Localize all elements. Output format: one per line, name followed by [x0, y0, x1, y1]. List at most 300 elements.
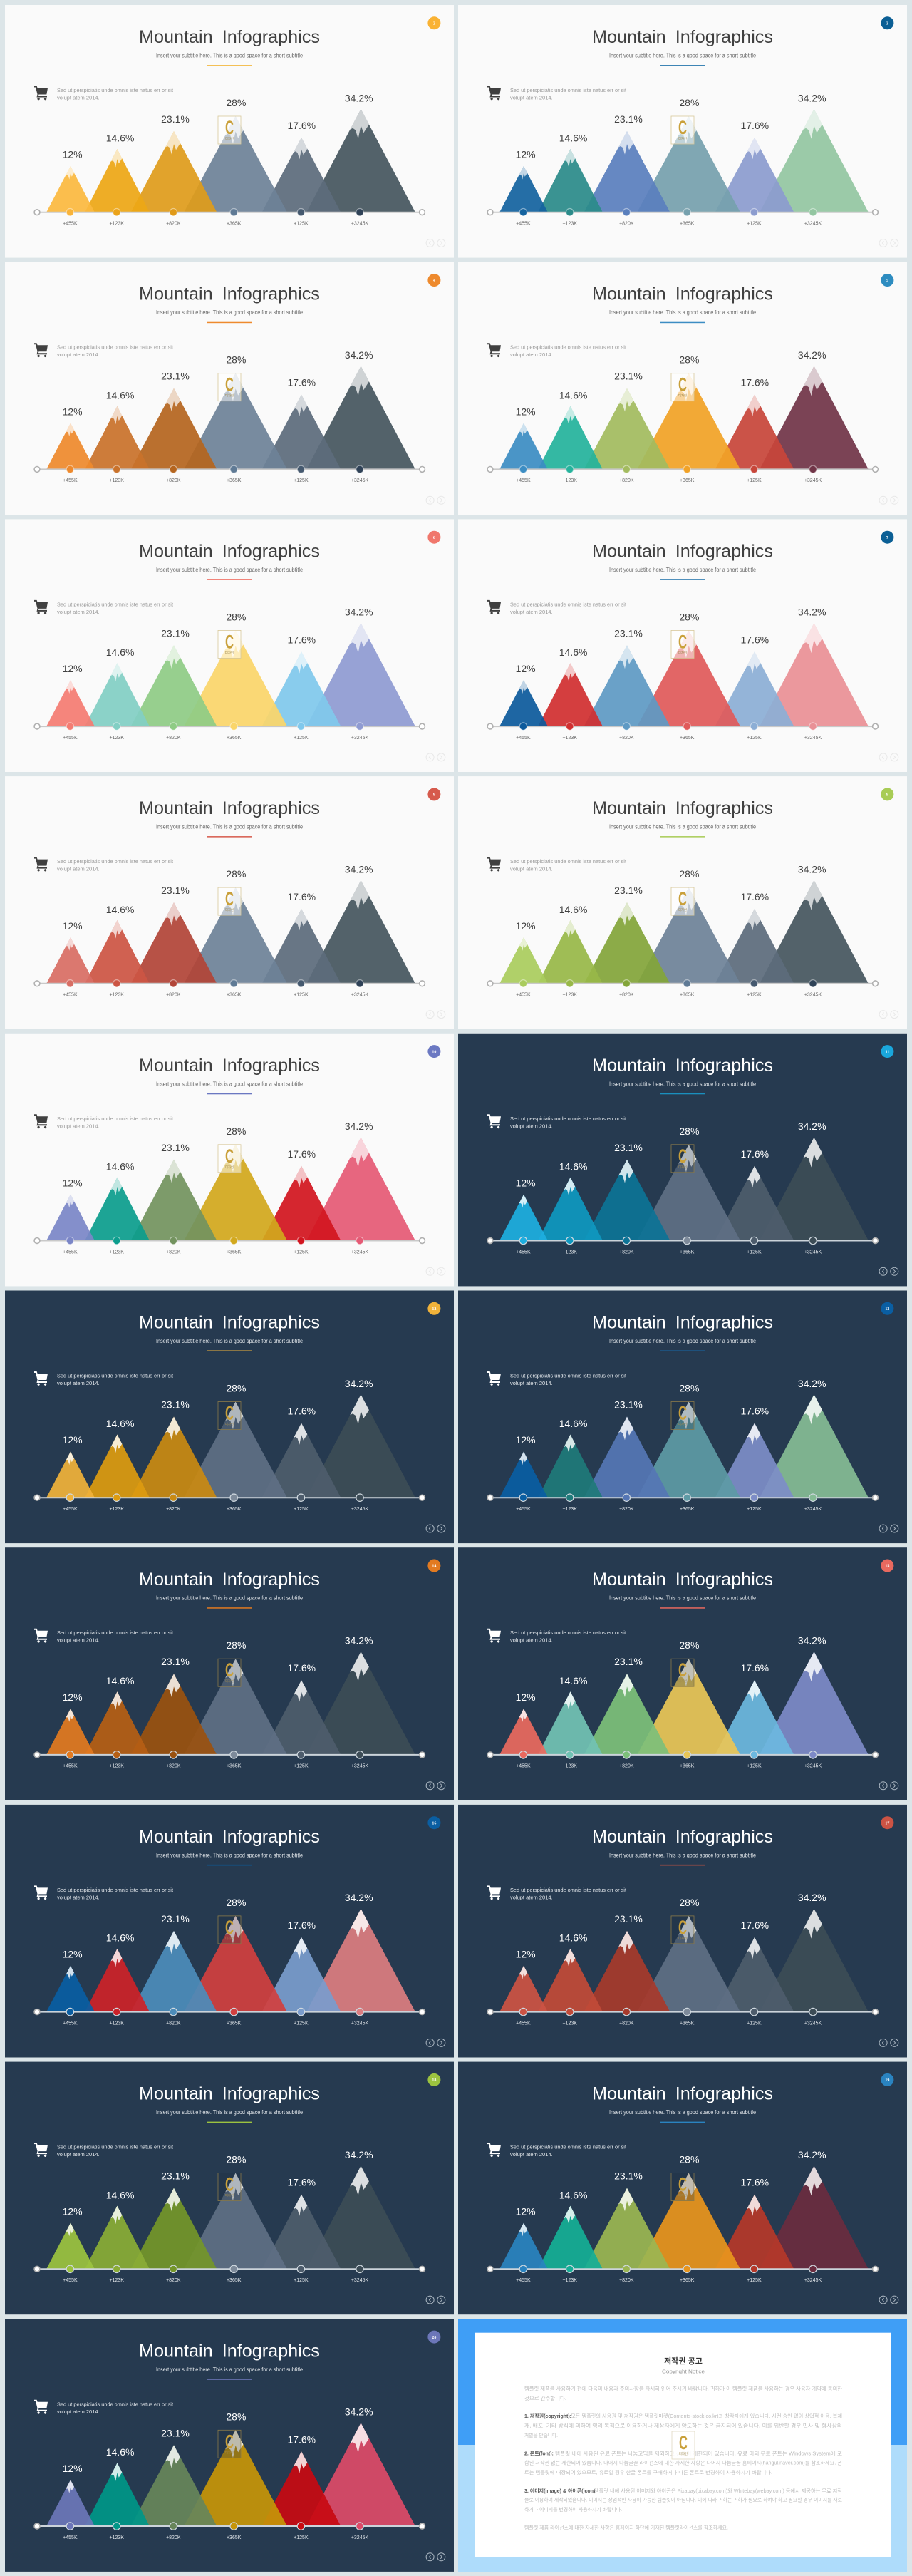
- watermark logo: [218, 1145, 241, 1173]
- watermark logo: 디자인: [678, 393, 687, 398]
- title: Mountain Infographics: [139, 541, 320, 561]
- title: Mountain Infographics: [592, 798, 773, 818]
- percentage labels: [63, 607, 373, 674]
- watermark logo: [218, 1401, 241, 1430]
- accent rule: [207, 1607, 252, 1609]
- percentage labels: 17.6%: [287, 1148, 316, 1160]
- percentage labels: 17.6%: [740, 634, 769, 645]
- accent rule: [660, 1350, 705, 1351]
- accent rule: [660, 65, 705, 66]
- percentage labels: 34.2%: [345, 92, 373, 103]
- watermark logo: 디자인: [225, 1421, 234, 1427]
- mountain chart: [47, 1138, 415, 1240]
- percentage labels: 17.6%: [287, 1662, 316, 1674]
- mountain chart: [47, 109, 415, 212]
- accent rule: [660, 322, 705, 323]
- description: Sed ut perspiciatis unde omnis iste natus err or sit: [57, 1373, 174, 1379]
- percentage labels: 23.1%: [614, 1398, 643, 1410]
- badge: 3: [886, 21, 888, 26]
- value labels: [63, 736, 368, 741]
- timeline with dots: [487, 1751, 878, 1758]
- icon: shopping cart: [34, 86, 48, 100]
- percentage labels: 23.1%: [161, 627, 190, 639]
- subtitle: Insert your subtitle here. This is a good space for a short subtitle: [609, 1081, 756, 1087]
- watermark logo: 디자인: [679, 2451, 688, 2456]
- description: Sed ut perspiciatis unde omnis iste natus err or sit: [57, 858, 174, 865]
- percentage labels: 14.6%: [559, 1932, 587, 1944]
- icon: shopping cart: [487, 1371, 501, 1386]
- watermark logo: [218, 373, 241, 401]
- description: volupt atem 2014.: [57, 1380, 100, 1386]
- percentage labels: [63, 2406, 373, 2474]
- description: volupt atem 2014.: [57, 1894, 100, 1900]
- clause 3 image and icon: 3. 이미지(image) & 아이콘(icon):: [524, 2488, 597, 2494]
- badge: [881, 1560, 893, 1572]
- value labels: [516, 478, 822, 483]
- value labels: +455K: [63, 1250, 78, 1254]
- value labels: +455K: [63, 221, 78, 227]
- icon: shopping cart: [34, 2400, 48, 2414]
- percentage labels: 14.6%: [106, 1418, 134, 1429]
- panel: slide 16 dark blue red: [5, 1805, 454, 2057]
- watermark logo: [218, 887, 241, 915]
- value labels: +125K: [294, 478, 309, 483]
- mountain chart: [47, 2423, 415, 2525]
- watermark logo: C: [678, 374, 687, 396]
- value labels: +820K: [166, 993, 181, 998]
- mountain chart: [500, 1652, 868, 1754]
- percentage labels: 14.6%: [559, 389, 587, 401]
- value labels: +3245K: [351, 736, 368, 741]
- percentage labels: 17.6%: [287, 2177, 316, 2188]
- mountain chart: [500, 623, 868, 726]
- percentage labels: 28%: [679, 97, 699, 108]
- percentage labels: 17.6%: [740, 891, 769, 902]
- percentage labels: 14.6%: [106, 904, 134, 915]
- timeline with dots: [34, 980, 425, 987]
- timeline with dots: [34, 2008, 425, 2016]
- percentage labels: [516, 92, 826, 160]
- subtitle: Insert your subtitle here. This is a good space for a short subtitle: [609, 53, 756, 58]
- percentage labels: 23.1%: [161, 885, 190, 896]
- watermark logo: 디자인: [678, 650, 687, 655]
- percentage labels: 12%: [516, 663, 536, 674]
- percentage labels: 28%: [226, 2154, 246, 2165]
- subtitle: Insert your subtitle here. This is a good space for a short subtitle: [156, 309, 303, 316]
- watermark logo: C: [225, 1403, 234, 1424]
- panel: slide 19 dark multicolor: [458, 2062, 907, 2314]
- icon: shopping cart: [34, 1371, 48, 1386]
- value labels: +125K: [294, 2278, 309, 2283]
- value labels: +455K: [516, 478, 531, 483]
- panel: slide 13 dark blue green: [458, 1290, 907, 1543]
- value labels: [63, 1250, 368, 1254]
- value labels: +125K: [294, 993, 309, 998]
- badge: [881, 16, 893, 29]
- value labels: +123K: [562, 478, 577, 483]
- value labels: +365K: [227, 2535, 242, 2540]
- value labels: +3245K: [351, 2021, 368, 2026]
- badge: 20: [432, 2336, 436, 2340]
- value labels: +455K: [63, 2021, 78, 2026]
- percentage labels: 14.6%: [559, 1418, 587, 1429]
- percentage labels: 14.6%: [559, 1675, 587, 1686]
- badge: 17: [885, 1821, 889, 1825]
- watermark logo: 디자인: [225, 2450, 234, 2455]
- percentage labels: 23.1%: [161, 1913, 190, 1925]
- value labels: +123K: [109, 2535, 124, 2540]
- clause 1 copyright: 재, 배포, 기타 방식에 의하여 영리 목적으로 이용하거나 제삼자에게 양도하는 것은 금지되어 있습니다. 이를 위반할 경우 민사 및 형사상의: [524, 2422, 842, 2429]
- watermark logo: 디자인: [678, 136, 687, 141]
- navigation arrows: [879, 1267, 898, 1275]
- percentage labels: 34.2%: [345, 607, 373, 618]
- panel: slide 18 dark green: [5, 2062, 454, 2314]
- percentage labels: 34.2%: [798, 1120, 826, 1132]
- value labels: [63, 2278, 368, 2283]
- panel: slide 20 dark purple multicolor: [5, 2319, 454, 2572]
- description: volupt atem 2014.: [510, 609, 553, 615]
- percentage labels: 12%: [63, 1434, 83, 1446]
- clause 1 copyright: 1. 저작권(copyright):: [524, 2413, 571, 2419]
- description: volupt atem 2014.: [510, 94, 553, 101]
- watermark logo: C: [678, 1145, 687, 1167]
- clause 3 image and icon: 하거나 이미지를 변경하여 사용하시기 바랍니다.: [524, 2506, 622, 2513]
- percentage labels: [516, 607, 826, 674]
- title: Mountain Infographics: [139, 2341, 320, 2361]
- percentage labels: 23.1%: [614, 1656, 643, 1667]
- navigation arrows: [879, 1011, 898, 1019]
- accent rule: [207, 1093, 252, 1094]
- value labels: +3245K: [804, 736, 822, 741]
- percentage labels: 34.2%: [345, 1634, 373, 1646]
- mountain chart: [500, 1909, 868, 2011]
- badge: [881, 1816, 893, 1829]
- navigation arrows: [879, 496, 898, 504]
- value labels: +123K: [109, 736, 124, 741]
- icon: shopping cart: [34, 1885, 48, 1900]
- percentage labels: 28%: [226, 868, 246, 880]
- closing note: 템플릿 제품 라이선스에 대한 자세한 사항은 홈페이지 하단에 기재된 템플릿라이선스를 참조하세요.: [524, 2525, 728, 2530]
- percentage labels: 34.2%: [345, 2406, 373, 2418]
- percentage labels: 23.1%: [614, 1142, 643, 1153]
- subtitle: Insert your subtitle here. This is a good space for a short subtitle: [156, 1595, 303, 1602]
- percentage labels: 17.6%: [740, 2177, 769, 2188]
- percentage labels: 17.6%: [287, 1920, 316, 1931]
- description: volupt atem 2014.: [510, 1894, 553, 1900]
- percentage labels: 12%: [63, 920, 83, 932]
- description: Sed ut perspiciatis unde omnis iste natus err or sit: [57, 344, 174, 351]
- subtitle: Insert your subtitle here. This is a good space for a short subtitle: [609, 824, 756, 830]
- percentage labels: 12%: [63, 1949, 83, 1960]
- badge: 19: [885, 2078, 889, 2083]
- watermark logo: C: [225, 1145, 234, 1167]
- percentage labels: 23.1%: [614, 113, 643, 125]
- watermark logo: 디자인: [225, 1679, 234, 1684]
- mountain chart: [47, 366, 415, 469]
- value labels: +123K: [562, 1250, 577, 1254]
- percentage labels: 17.6%: [740, 377, 769, 388]
- watermark logo: [671, 1916, 694, 1944]
- watermark logo: C: [225, 631, 234, 652]
- watermark logo: [671, 1659, 694, 1686]
- percentage labels: 28%: [226, 2411, 246, 2422]
- panel: slide 7 light blue red: [458, 519, 907, 772]
- value labels: +365K: [227, 1250, 242, 1254]
- badge: [881, 1302, 893, 1315]
- panel: slide 15 dark pastel: [458, 1547, 907, 1800]
- accent rule: [207, 2122, 252, 2123]
- navigation arrows: [426, 753, 445, 761]
- badge: 5: [886, 279, 888, 283]
- percentage labels: [63, 863, 373, 932]
- watermark logo: [218, 1916, 241, 1944]
- watermark logo: [671, 1145, 694, 1173]
- panel: slide 4 light orange: [5, 262, 454, 515]
- percentage labels: 34.2%: [798, 1634, 826, 1646]
- description: Sed ut perspiciatis unde omnis iste natus err or sit: [510, 344, 627, 351]
- percentage labels: 28%: [226, 354, 246, 366]
- watermark logo: [218, 2173, 241, 2201]
- description: Sed ut perspiciatis unde omnis iste natus err or sit: [57, 1116, 174, 1122]
- badge: [428, 1045, 440, 1058]
- badge: [881, 1045, 893, 1058]
- value labels: +125K: [747, 736, 762, 741]
- percentage labels: 34.2%: [345, 2149, 373, 2160]
- mountain chart: [47, 1394, 415, 1497]
- value labels: +123K: [109, 2278, 124, 2283]
- watermark logo: 디자인: [225, 393, 234, 398]
- value labels: +125K: [747, 1764, 762, 1769]
- value labels: +365K: [680, 1507, 695, 1512]
- timeline with dots: [34, 1494, 425, 1501]
- percentage labels: 34.2%: [345, 349, 373, 361]
- badge: 13: [885, 1307, 889, 1312]
- title: Mountain Infographics: [139, 1056, 320, 1076]
- timeline with dots: [487, 208, 878, 216]
- value labels: +455K: [63, 1507, 78, 1512]
- clause 2 font: 트는 템플릿에 내장되어 있으므로, 유료일 경우 한글 폰트를 구매하거나 다른 폰트로 변경하여 사용하시기 바랍니다.: [524, 2469, 772, 2475]
- watermark logo: [218, 2430, 241, 2458]
- description: volupt atem 2014.: [510, 2151, 553, 2158]
- value labels: +125K: [747, 1507, 762, 1512]
- value labels: +820K: [166, 221, 181, 227]
- value labels: +820K: [619, 2021, 634, 2026]
- description: volupt atem 2014.: [510, 1123, 553, 1129]
- watermark logo: C: [678, 117, 687, 138]
- percentage labels: 14.6%: [106, 646, 134, 658]
- value labels: +365K: [680, 478, 695, 483]
- percentage labels: 28%: [226, 1639, 246, 1651]
- value labels: +3245K: [351, 478, 368, 483]
- percentage labels: 28%: [679, 611, 699, 622]
- badge: 16: [432, 1821, 436, 1825]
- icon: shopping cart: [487, 1114, 501, 1128]
- title: Mountain Infographics: [592, 27, 773, 47]
- panel: slide 9 light green: [458, 776, 907, 1029]
- value labels: +820K: [166, 478, 181, 483]
- percentage labels: 28%: [679, 354, 699, 366]
- watermark logo: 디자인: [225, 1936, 234, 1941]
- watermark logo: [671, 2173, 694, 2201]
- watermark logo: C: [678, 1917, 687, 1938]
- panel: slide 6 light pastel: [5, 519, 454, 772]
- percentage labels: 14.6%: [559, 133, 587, 144]
- subtitle: Insert your subtitle here. This is a good space for a short subtitle: [609, 1595, 756, 1602]
- title: Mountain Infographics: [592, 541, 773, 561]
- percentage labels: [63, 2149, 373, 2217]
- timeline with dots: [34, 208, 425, 216]
- value labels: +455K: [516, 2278, 531, 2283]
- subtitle: Insert your subtitle here. This is a good space for a short subtitle: [156, 1338, 303, 1344]
- value labels: +455K: [63, 478, 78, 483]
- panel: slide 10 light multicolor bold: [5, 1034, 454, 1286]
- mountain chart: [500, 1394, 868, 1497]
- copyright heading: 저작권 공고: [664, 2356, 703, 2366]
- timeline with dots: [34, 2523, 425, 2530]
- value labels: +123K: [109, 993, 124, 998]
- badge: 14: [432, 1565, 436, 1569]
- timeline with dots: [487, 980, 878, 987]
- mountain chart: [47, 1652, 415, 1754]
- percentage labels: 23.1%: [161, 113, 190, 125]
- value labels: +3245K: [351, 1764, 368, 1769]
- value labels: +125K: [747, 2278, 762, 2283]
- badge: [881, 788, 893, 800]
- value labels: +820K: [166, 1250, 181, 1254]
- value labels: +455K: [516, 1764, 531, 1769]
- watermark logo: [218, 116, 241, 144]
- value labels: +3245K: [804, 478, 822, 483]
- badge: [881, 2073, 893, 2086]
- watermark logo: C: [225, 2174, 234, 2195]
- icon: shopping cart: [34, 2143, 48, 2157]
- timeline with dots: [487, 2008, 878, 2016]
- accent rule: [660, 579, 705, 580]
- percentage labels: 34.2%: [798, 607, 826, 618]
- panel: slide 14 dark orange: [5, 1547, 454, 1800]
- watermark logo: 디자인: [678, 2193, 687, 2198]
- percentage labels: 28%: [226, 1125, 246, 1137]
- mountain chart: [47, 1909, 415, 2011]
- mountain chart: [47, 880, 415, 983]
- subtitle: Insert your subtitle here. This is a good space for a short subtitle: [156, 2109, 303, 2116]
- percentage labels: 23.1%: [614, 2170, 643, 2182]
- value labels: +455K: [63, 2535, 78, 2540]
- watermark logo: 디자인: [678, 1679, 687, 1684]
- percentage labels: 12%: [516, 920, 536, 932]
- title: Mountain Infographics: [592, 1056, 773, 1076]
- value labels: +820K: [619, 478, 634, 483]
- panel: slide 3 light blue green: [458, 5, 907, 258]
- timeline with dots: [487, 465, 878, 473]
- percentage labels: 12%: [63, 406, 83, 417]
- title: Mountain Infographics: [592, 2084, 773, 2104]
- watermark logo: 디자인: [225, 650, 234, 655]
- value labels: +123K: [562, 993, 577, 998]
- badge: [428, 16, 440, 29]
- percentage labels: [516, 1635, 826, 1703]
- clause 1 copyright: 모든 템플릿의 사용권 및 저작권은 템플릿마켓(Contents-stock.co.kr)과 창작자에게 있습니다. 사전 승인 없이 상업적 이용, 복제: [571, 2413, 842, 2419]
- value labels: +123K: [109, 1507, 124, 1512]
- icon: shopping cart: [34, 1629, 48, 1643]
- percentage labels: 14.6%: [559, 1161, 587, 1173]
- value labels: +365K: [680, 221, 695, 227]
- clause 2 font: 템플릿 내에 사용된 유료 폰트는 나눔고딕을 제외하고 상용이 제한되어 있습니다. 유료 이외 무료 폰트는 Windows System에 포: [555, 2451, 843, 2456]
- panel: slide 2 light yellow: [5, 5, 454, 258]
- percentage labels: [516, 2149, 826, 2217]
- value labels: +820K: [166, 1507, 181, 1512]
- clause 3 image and icon: 템플릿 내에 사용된 이미지와 아이콘은 Pixabay(pixabay.com)와 Whitebay(webay.com) 등에서 제공하는 무료 저작: [594, 2488, 843, 2494]
- watermark logo: 디자인: [678, 907, 687, 912]
- icon: shopping cart: [34, 857, 48, 871]
- value labels: [516, 993, 822, 998]
- mountain chart: [500, 1138, 868, 1240]
- timeline with dots: [34, 1237, 425, 1245]
- watermark logo: 디자인: [225, 907, 234, 912]
- value labels: +125K: [294, 221, 309, 227]
- navigation arrows: [879, 239, 898, 247]
- percentage labels: 14.6%: [106, 2189, 134, 2200]
- value labels: +455K: [516, 736, 531, 741]
- watermark logo: [671, 373, 694, 401]
- percentage labels: 14.6%: [559, 904, 587, 915]
- value labels: +365K: [680, 736, 695, 741]
- percentage labels: 14.6%: [106, 389, 134, 401]
- watermark logo: C: [225, 2431, 234, 2452]
- value labels: +123K: [109, 2021, 124, 2026]
- percentage labels: 12%: [516, 1434, 536, 1446]
- subtitle: Insert your subtitle here. This is a good space for a short subtitle: [609, 1852, 756, 1858]
- subtitle: Insert your subtitle here. This is a good space for a short subtitle: [609, 2109, 756, 2116]
- watermark logo: 디자인: [225, 136, 234, 141]
- percentage labels: 23.1%: [614, 885, 643, 896]
- percentage labels: 34.2%: [345, 1892, 373, 1903]
- accent rule: [660, 1607, 705, 1609]
- percentage labels: 14.6%: [559, 2189, 587, 2200]
- watermark logo: [218, 1659, 241, 1686]
- badge: [428, 531, 440, 544]
- value labels: [63, 1507, 368, 1512]
- value labels: +365K: [227, 736, 242, 741]
- value labels: +365K: [227, 1764, 242, 1769]
- value labels: [63, 2021, 368, 2026]
- badge: 15: [885, 1565, 889, 1569]
- percentage labels: [516, 1378, 826, 1446]
- watermark logo: C: [225, 374, 234, 396]
- value labels: [63, 2535, 368, 2540]
- title: Mountain Infographics: [139, 1313, 320, 1333]
- value labels: [63, 221, 368, 227]
- percentage labels: 12%: [63, 663, 83, 674]
- value labels: +3245K: [804, 221, 822, 227]
- value labels: [516, 221, 822, 227]
- value labels: +455K: [63, 1764, 78, 1769]
- percentage labels: 34.2%: [345, 863, 373, 875]
- percentage labels: 17.6%: [740, 1662, 769, 1674]
- mountain chart: [500, 2166, 868, 2269]
- accent rule: [207, 1350, 252, 1351]
- badge: 6: [433, 536, 435, 540]
- watermark logo: C: [679, 2432, 688, 2453]
- value labels: +820K: [166, 2278, 181, 2283]
- value labels: +820K: [619, 1764, 634, 1769]
- value labels: +123K: [109, 1764, 124, 1769]
- value labels: +455K: [516, 221, 531, 227]
- watermark logo: 디자인: [225, 2193, 234, 2198]
- value labels: +455K: [516, 993, 531, 998]
- watermark logo: C: [678, 1659, 687, 1681]
- percentage labels: 14.6%: [106, 1675, 134, 1686]
